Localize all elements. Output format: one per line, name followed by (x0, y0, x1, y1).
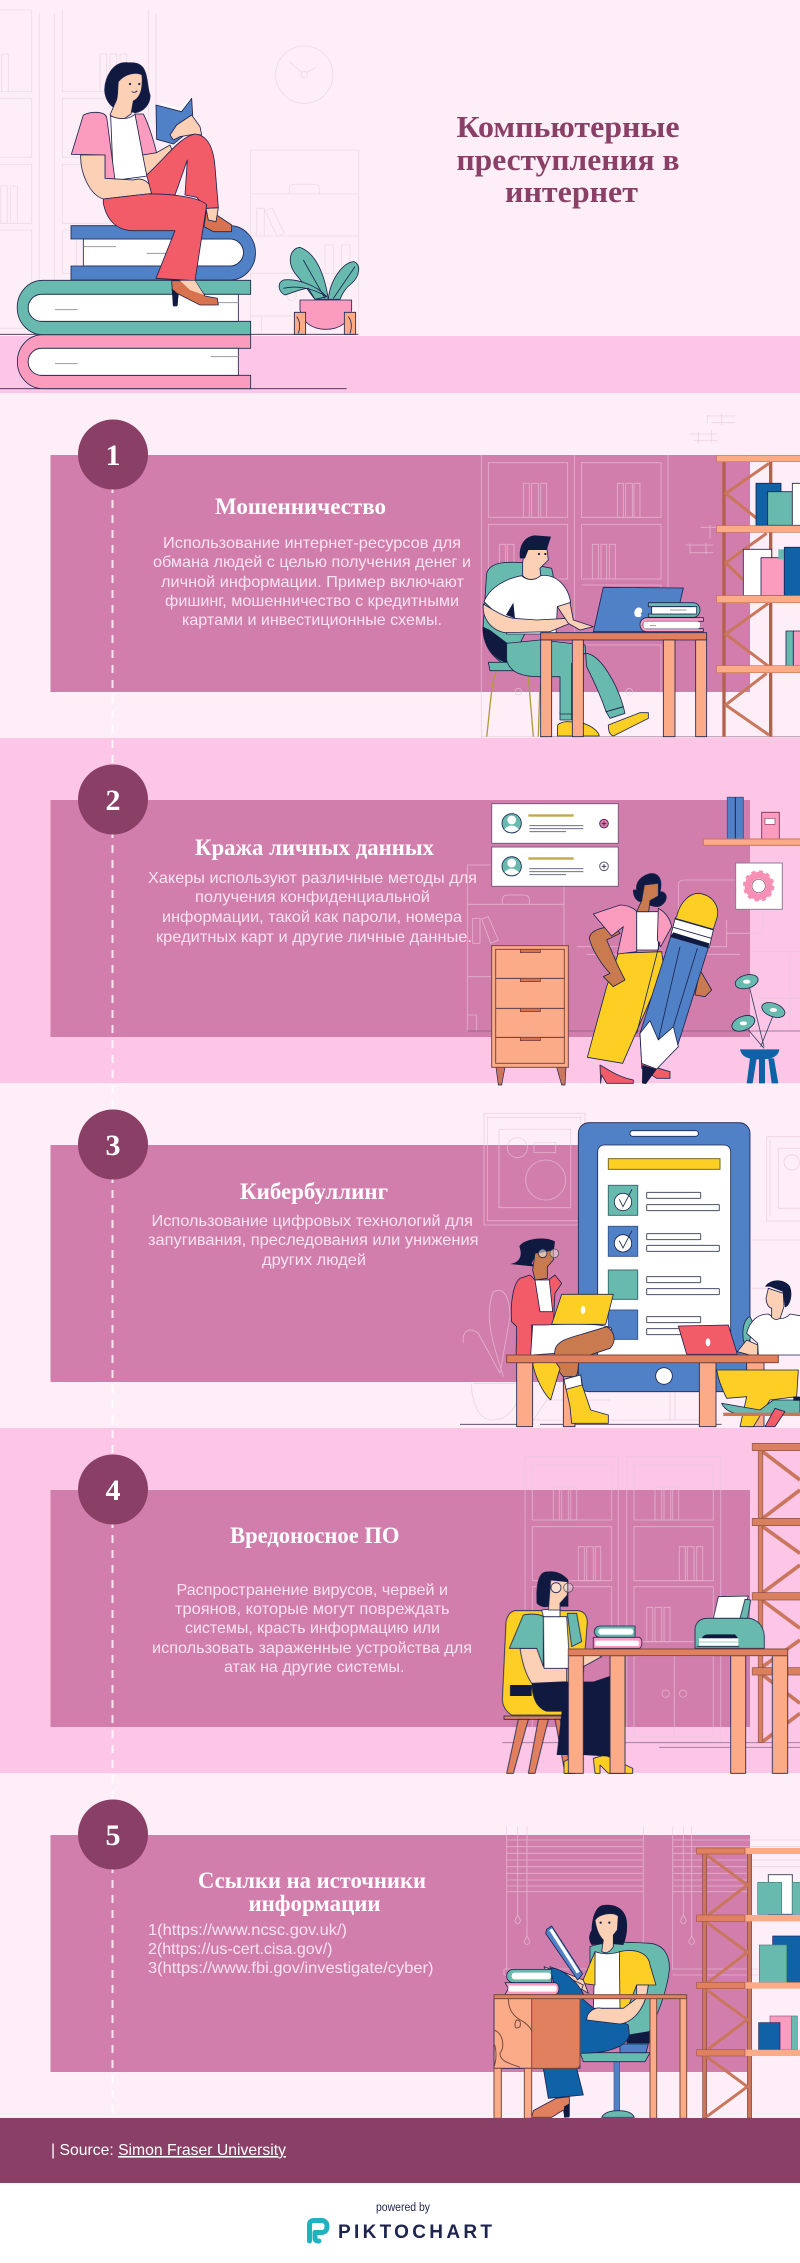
laptop and books (593, 587, 703, 632)
gear card (736, 863, 782, 909)
step 3 body text: Использование цифровых технологий для (152, 1213, 473, 1230)
step 4 badge: 4 (106, 1474, 120, 1507)
books on desk (505, 1969, 559, 1995)
step 2 body text: кредитных карт и другие личные данные. (156, 929, 472, 946)
woman with pencil (587, 874, 712, 1083)
step 4 body text: системы, красть информацию или (185, 1620, 440, 1637)
backdrop: bookcase line art (525, 1457, 721, 1742)
wordmark: PIKTOCHART (338, 2222, 492, 2243)
step 5 badge (78, 1800, 148, 1870)
icon: Piktochart logo (310, 2220, 327, 2241)
step 1 body text: картами и инвестиционные схемы. (182, 612, 442, 629)
title: преступления в (456, 142, 680, 177)
printer (695, 1596, 764, 1648)
step 2 body text: получения конфиденциальной (195, 889, 430, 906)
giant pencil (637, 893, 718, 1084)
shelf, book and box (703, 797, 800, 845)
books on desk (593, 1626, 642, 1648)
step 2 body text (148, 870, 477, 946)
step 3 heading: Кибербуллинг (240, 1179, 388, 1204)
step 3 body text: запугивания, преследования или унижения (148, 1232, 478, 1249)
chair (580, 1942, 669, 2117)
step 5 source links: 1(https://www.ncsc.gov.uk/) (148, 1922, 347, 1939)
powered by: powered by (376, 2202, 430, 2214)
step 1 body text (153, 535, 471, 629)
source line: | Source: Simon Fraser University (51, 2142, 286, 2159)
plant on stool (730, 972, 787, 1083)
step 5 heading (198, 1868, 426, 1916)
man at table (678, 1280, 800, 1427)
panel: step 3 background (50, 1145, 750, 1382)
floor line (540, 736, 800, 737)
chair (502, 1611, 587, 1773)
plant (279, 247, 359, 334)
illustration: woman with pencil, cards and dresser (467, 797, 800, 1085)
step 5 source links (148, 1922, 434, 1977)
step 1 badge (78, 420, 148, 490)
step 1 heading: Мошенничество (215, 494, 386, 519)
illustration: woman reading on stack of books (0, 10, 359, 389)
backdrop: window blinds line art (504, 1827, 800, 1975)
step 5 badge: 5 (106, 1819, 120, 1852)
step 3 body text: других людей (262, 1252, 366, 1269)
step 1 body text: фишинг, мошенничество с кредитными (165, 593, 459, 610)
step 5 source links: 3(https://www.fbi.gov/investigate/cyber) (148, 1960, 434, 1977)
panel: step 5 background (50, 1835, 750, 2072)
baseline rules (0, 334, 358, 389)
step 5 heading: информации (248, 1891, 380, 1916)
step 4 body text: атак на другие системы. (224, 1659, 404, 1676)
step 4 heading: Вредоносное ПО (230, 1523, 400, 1548)
illustration: woman with tablet at desk and shelf (494, 1827, 800, 2118)
step 4 body text (152, 1582, 472, 1676)
step 3 badge (78, 1110, 148, 1180)
shelf with books (717, 455, 800, 737)
panel: step 2 background (50, 800, 750, 1037)
desk (494, 1995, 687, 2118)
shelf frame (752, 1443, 800, 1743)
step 1 body text: личной информации. Пример включают (161, 574, 465, 591)
step 1 badge: 1 (106, 439, 120, 472)
step 4 body text: Распространение вирусов, червей и (176, 1582, 448, 1599)
book: blue (71, 226, 255, 280)
table legs (699, 1363, 764, 1427)
step 1 body text: обмана людей с целью получения денег и (153, 554, 471, 571)
backdrop: bookcase, clock and shelf line art (0, 10, 359, 333)
woman figure (71, 63, 232, 306)
title: Компьютерные (456, 109, 680, 144)
floor line (467, 1029, 800, 1032)
profile cards (492, 804, 618, 886)
dashed timeline (112, 470, 114, 2118)
woman reading tablet (532, 1905, 656, 2117)
illustration: woman at desk with printer (502, 1443, 800, 1773)
title: интернет (505, 174, 638, 209)
step 2 badge: 2 (106, 784, 120, 817)
step 1 body text: Использование интернет-ресурсов для (163, 535, 461, 552)
step 5 source links: 2(https://us-cert.cisa.gov/) (148, 1941, 332, 1958)
step 2 body text: Хакеры используют различные методы для (148, 870, 477, 887)
backdrop: room line art (467, 865, 800, 1032)
desk (568, 1649, 788, 1773)
panel: step 4 background (50, 1490, 750, 1727)
dresser (492, 946, 568, 1085)
floor line (460, 1423, 722, 1426)
step 3 body text (148, 1213, 478, 1269)
shelf with books (697, 1848, 800, 2118)
title (456, 109, 680, 209)
desk (541, 633, 707, 737)
floor lines (502, 1743, 800, 1747)
step 4 badge (78, 1454, 148, 1524)
step 3 badge: 3 (106, 1129, 120, 1162)
step 2 badge (78, 764, 148, 834)
woman seated (509, 1571, 633, 1773)
book: pink (17, 335, 251, 389)
woman with yellow laptop (510, 1239, 614, 1427)
footer bar (0, 2118, 800, 2183)
table top (507, 1355, 778, 1363)
step 4 body text: использовать зараженные устройства для (152, 1640, 472, 1657)
backdrop: frames and plant line art (463, 1113, 800, 1420)
step 4 body text: троянов, которые могут повреждать (175, 1601, 450, 1618)
step 5 heading: Ссылки на источники (198, 1868, 426, 1893)
phone (578, 1123, 750, 1392)
step 2 body text: информации, такой как пароли, номера (162, 909, 462, 926)
panel: step 1 background (50, 455, 750, 692)
book: teal (17, 280, 251, 335)
illustration: man at laptop with shelf (481, 413, 800, 738)
step 2 heading: Кража личных данных (195, 835, 434, 860)
man seated on chair (483, 535, 648, 737)
backdrop: bookcase line art (481, 413, 735, 738)
illustration: phone with two people at table (460, 1113, 800, 1427)
